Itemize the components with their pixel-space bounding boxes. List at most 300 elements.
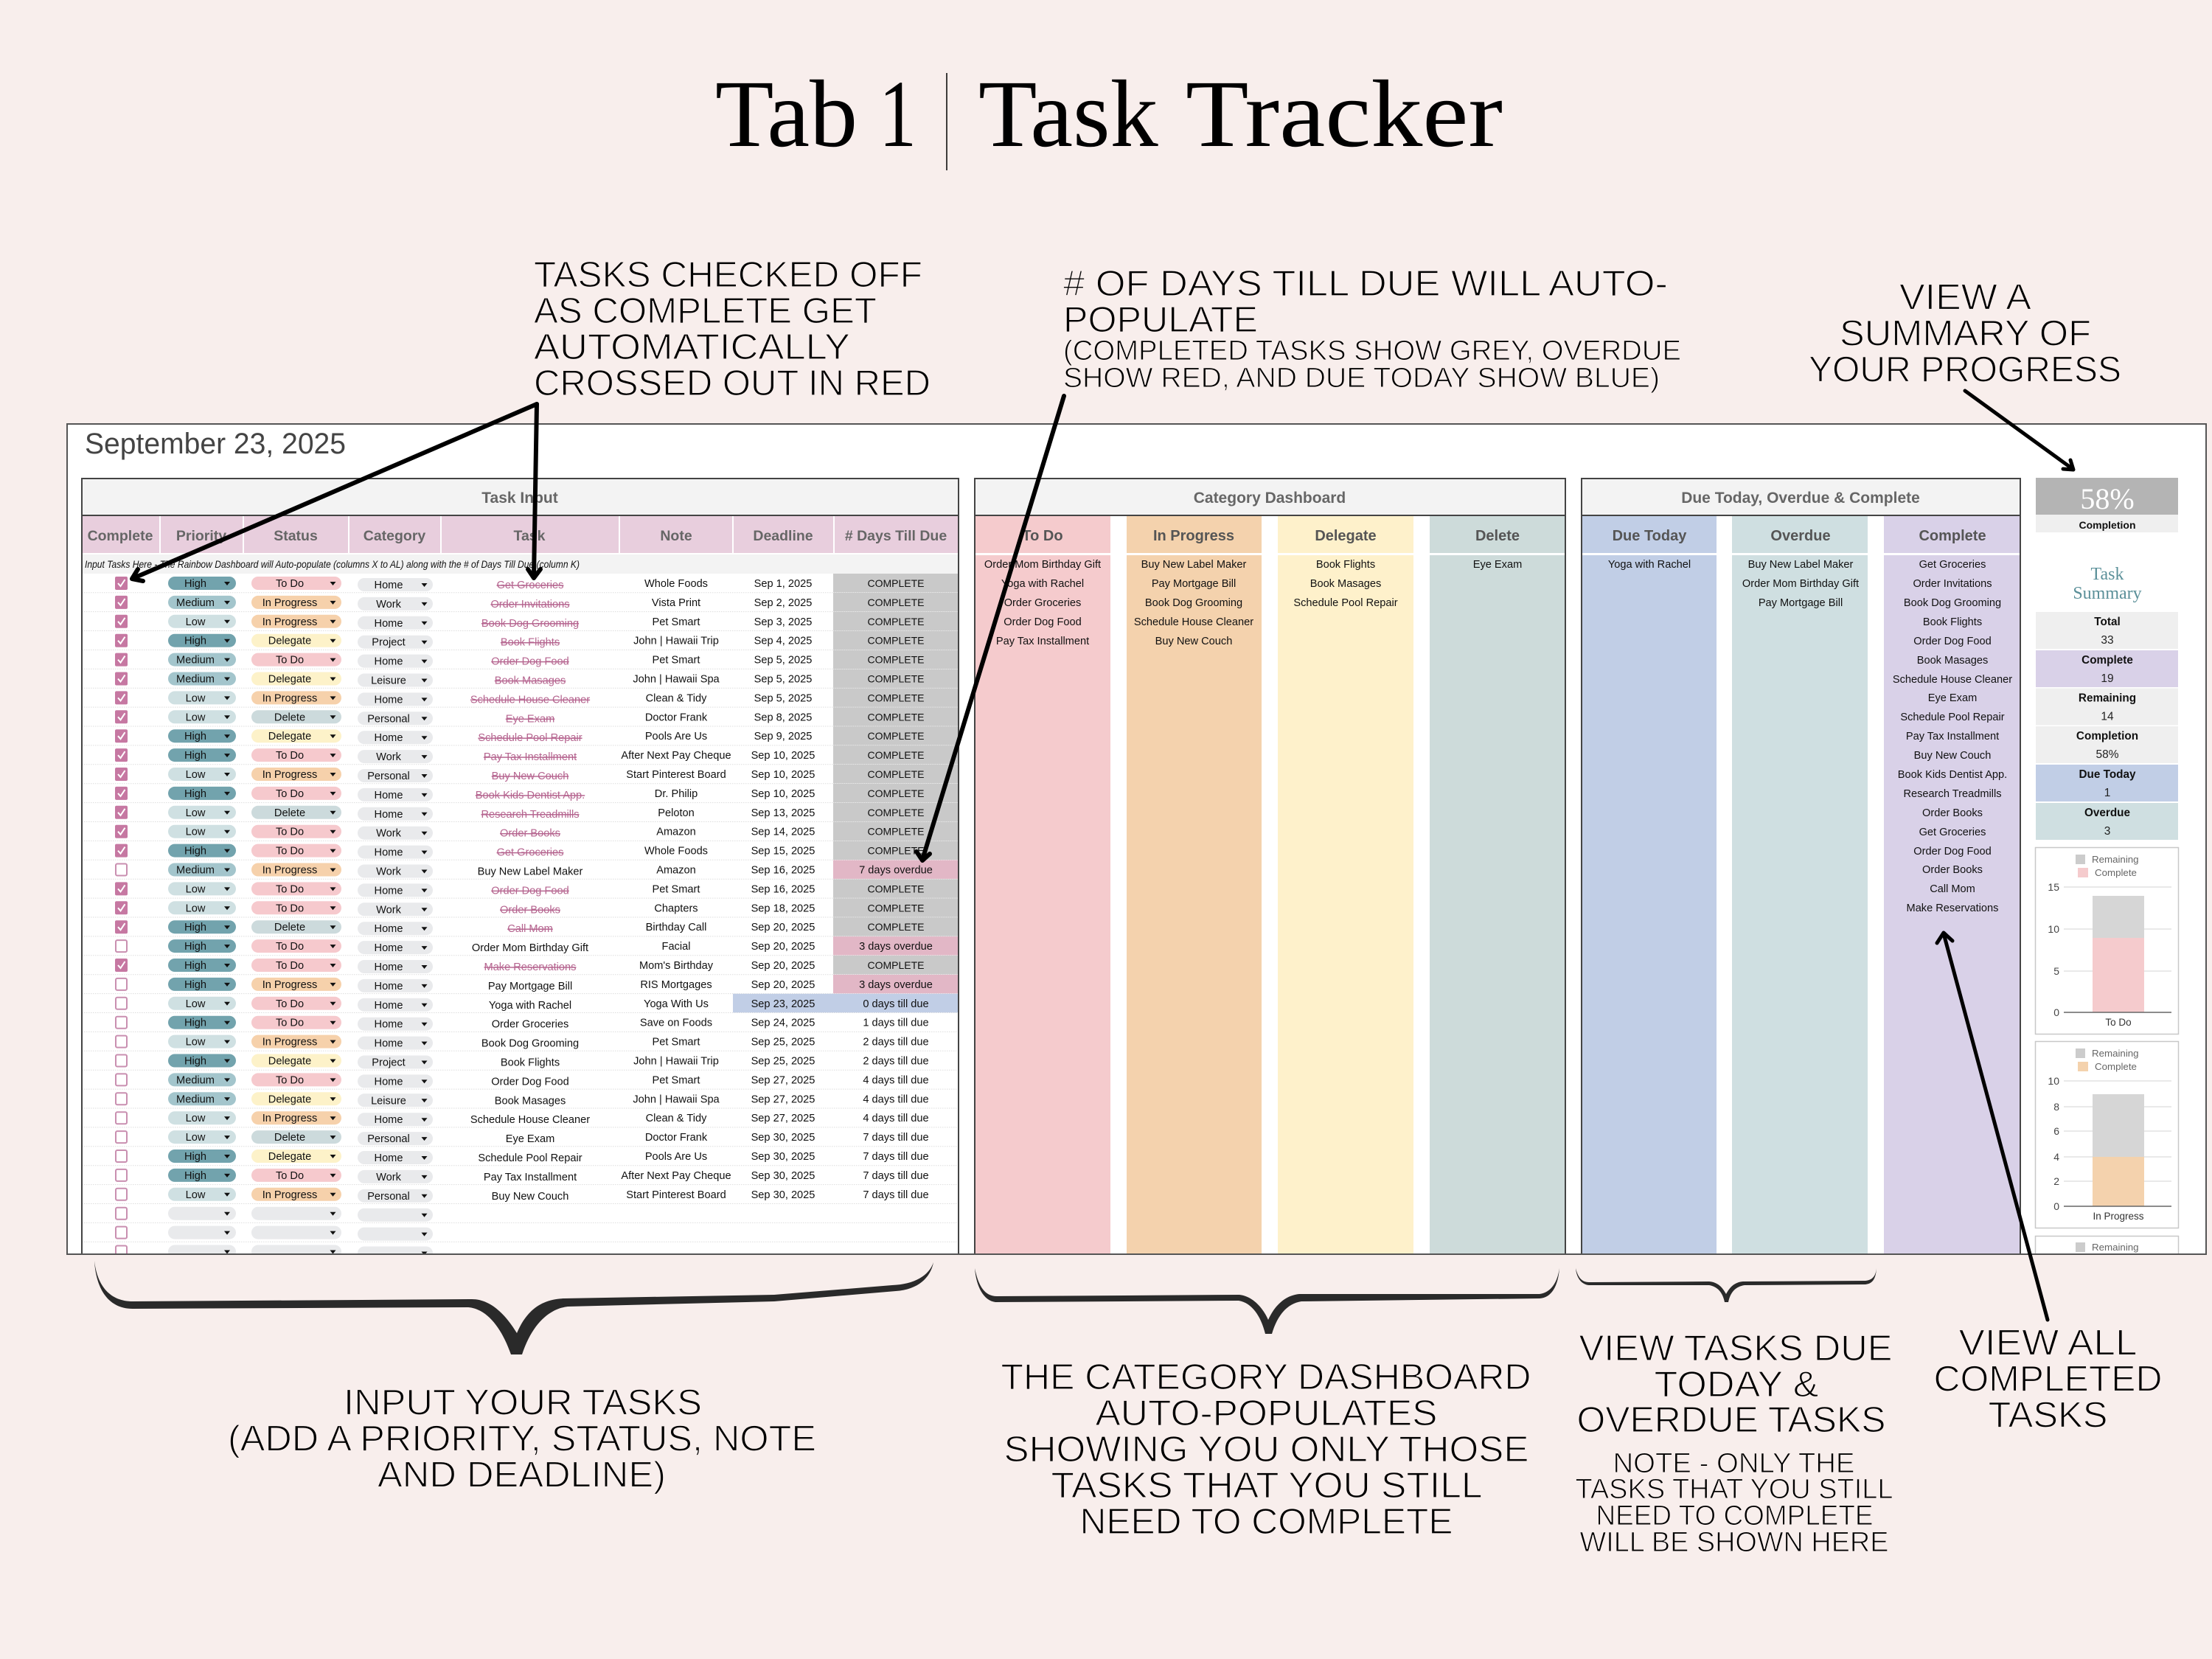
row 2: In Progress bbox=[262, 597, 317, 609]
row 13: Low bbox=[186, 807, 206, 819]
column: complete: Make Reservations bbox=[1907, 902, 1998, 914]
row 12: High bbox=[184, 788, 206, 800]
column: due today: Yoga with Rachel bbox=[1608, 559, 1691, 571]
arrow: to crossed-out task bbox=[528, 404, 540, 578]
column: to do: Pay Tax Installment bbox=[996, 636, 1089, 647]
row 7: In Progress bbox=[262, 692, 317, 704]
table frame lines bbox=[82, 479, 2020, 1254]
caption: category dashboard: AUTO-POPULATES bbox=[1096, 1394, 1438, 1433]
heading: due today: Due Today, Overdue & Complete bbox=[1681, 490, 1920, 507]
row 14: Low bbox=[186, 827, 206, 838]
panel: summary stats: Remaining bbox=[2079, 692, 2136, 705]
brace: category bbox=[975, 1268, 1559, 1334]
row 11: Buy New Couch bbox=[492, 771, 568, 782]
caption: view tasks due: NEED TO COMPLETE bbox=[1596, 1500, 1873, 1531]
column: complete: Order Books bbox=[1922, 864, 1983, 876]
column: to do: Order Dog Food bbox=[1004, 616, 1082, 628]
row 32: After Next Pay Cheque bbox=[621, 1170, 731, 1182]
column: complete: Pay Tax Installment bbox=[1906, 731, 1999, 742]
row 30: 7 days till due bbox=[863, 1132, 929, 1144]
panel: summary stats: Completion bbox=[2076, 730, 2138, 742]
row 7: Low bbox=[186, 692, 206, 704]
heading: category dashboard: Category Dashboard bbox=[1194, 490, 1346, 507]
row 6: Leisure bbox=[371, 675, 406, 687]
row 3: COMPLETE bbox=[867, 616, 925, 627]
row 23 bbox=[82, 994, 959, 1013]
row 27: Medium bbox=[176, 1074, 215, 1086]
row 2: Order Invitations bbox=[490, 599, 570, 611]
row 13: Research Treadmills bbox=[481, 809, 580, 821]
heading: task summary: Task bbox=[2091, 565, 2124, 584]
row 5: To Do bbox=[276, 655, 304, 667]
panel: summary stats bbox=[2036, 612, 2178, 840]
row 1: Sep 1, 2025 bbox=[754, 578, 812, 590]
column headers: Status bbox=[274, 528, 318, 544]
row 24: Home bbox=[375, 1019, 403, 1031]
row 19: Home bbox=[375, 923, 403, 935]
row 15: High bbox=[184, 846, 206, 858]
chart: to do bbox=[2035, 848, 2178, 1034]
panel: summary stats: 1 bbox=[2104, 787, 2110, 799]
row 33: Low bbox=[186, 1189, 206, 1201]
row 4: Book Flights bbox=[501, 637, 560, 649]
row 4: John | Hawaii Trip bbox=[633, 636, 719, 647]
row 25: Low bbox=[186, 1037, 206, 1048]
row 23: Sep 23, 2025 bbox=[751, 998, 815, 1010]
row 22: RIS Mortgages bbox=[640, 979, 712, 991]
row 13 bbox=[82, 803, 959, 821]
row 5: COMPLETE bbox=[867, 654, 925, 666]
column: delegate: Book Masages bbox=[1310, 578, 1381, 590]
row 18: Chapters bbox=[654, 902, 698, 914]
row 28: John | Hawaii Spa bbox=[633, 1093, 720, 1105]
row 24: Sep 24, 2025 bbox=[751, 1018, 815, 1029]
row 18: COMPLETE bbox=[867, 902, 925, 914]
panel: summary stats: Due Today bbox=[2079, 768, 2136, 781]
row 24 bbox=[82, 1016, 959, 1032]
row 13: Sep 13, 2025 bbox=[751, 807, 815, 819]
chart: in progress: 0 bbox=[2053, 1200, 2059, 1212]
row 9: Delegate bbox=[268, 731, 311, 742]
row 33: In Progress bbox=[262, 1189, 317, 1201]
sheet border bbox=[67, 424, 2206, 1254]
column: to do bbox=[984, 528, 1101, 647]
arrow: to completed tasks bbox=[1937, 933, 2048, 1320]
row 18: Work bbox=[376, 904, 402, 916]
row 19: Sep 20, 2025 bbox=[751, 922, 815, 933]
row 9: High bbox=[184, 731, 206, 742]
panel: completion bbox=[2036, 478, 2178, 532]
row 21: Sep 20, 2025 bbox=[751, 960, 815, 972]
column: complete: Complete bbox=[1919, 528, 1986, 544]
callout: days till due: POPULATE bbox=[1063, 300, 1258, 340]
panel: category dashboard bbox=[975, 479, 1565, 1254]
row 2: Work bbox=[376, 599, 402, 611]
column: in progress: Pay Mortgage Bill bbox=[1152, 578, 1236, 590]
row 4: COMPLETE bbox=[867, 635, 925, 647]
chart: to do: Remaining bbox=[2092, 854, 2139, 865]
row 2: Vista Print bbox=[652, 597, 700, 609]
row 6 bbox=[82, 669, 959, 688]
row 19 bbox=[82, 917, 959, 936]
row 29 bbox=[82, 1111, 959, 1127]
column: in progress: Buy New Couch bbox=[1155, 636, 1232, 647]
row 15 bbox=[82, 841, 959, 860]
row 22: Pay Mortgage Bill bbox=[488, 981, 572, 992]
panel: summary stats: 14 bbox=[2101, 711, 2114, 723]
row 19: COMPLETE bbox=[867, 921, 925, 933]
column: overdue: Overdue bbox=[1770, 528, 1831, 544]
row 25: In Progress bbox=[262, 1037, 317, 1048]
column: complete: Book Dog Grooming bbox=[1904, 597, 2001, 609]
column: complete: Get Groceries bbox=[1919, 559, 1986, 571]
row 27 bbox=[82, 1073, 959, 1089]
row 28: Delegate bbox=[268, 1093, 311, 1105]
column: to do: Order Mom Birthday Gift bbox=[984, 559, 1101, 571]
row 31: High bbox=[184, 1151, 206, 1163]
row 12: To Do bbox=[276, 788, 304, 800]
row 2 bbox=[82, 593, 959, 612]
row 30 bbox=[82, 1130, 959, 1147]
row 20: Order Mom Birthday Gift bbox=[472, 942, 588, 954]
row 8 bbox=[82, 707, 959, 726]
row 6: Medium bbox=[176, 674, 215, 686]
caption: input your tasks: AND DEADLINE) bbox=[378, 1455, 666, 1495]
row 12 bbox=[82, 784, 959, 803]
row 22: In Progress bbox=[262, 979, 317, 991]
column: complete: Schedule House Cleaner bbox=[1893, 674, 2012, 686]
caption: view tasks due: NOTE - ONLY THE bbox=[1613, 1448, 1855, 1479]
column: overdue bbox=[1742, 528, 1859, 609]
row 25: Sep 25, 2025 bbox=[751, 1037, 815, 1048]
row 20 bbox=[82, 936, 959, 956]
row 1: To Do bbox=[276, 578, 304, 590]
row 30: Low bbox=[186, 1132, 206, 1144]
row 14: Amazon bbox=[656, 827, 696, 838]
row 11: Sep 10, 2025 bbox=[751, 769, 815, 781]
chart: delegate, clipped bbox=[2035, 1236, 2178, 1280]
row 9: Home bbox=[375, 732, 403, 744]
row 20: Home bbox=[375, 942, 403, 954]
row 11: Start Pinterest Board bbox=[626, 769, 726, 781]
row 29: Home bbox=[375, 1114, 403, 1126]
row 16 bbox=[82, 860, 959, 879]
row 21: Mom's Birthday bbox=[639, 960, 714, 972]
row 24: Order Groceries bbox=[492, 1019, 568, 1031]
row 24: Save on Foods bbox=[640, 1018, 712, 1029]
row 30: Eye Exam bbox=[506, 1133, 554, 1145]
caption: category dashboard: THE CATEGORY DASHBOARD bbox=[1001, 1357, 1531, 1397]
column headers: Category bbox=[364, 528, 425, 544]
row 6: Delegate bbox=[268, 674, 311, 686]
row 21: To Do bbox=[276, 960, 304, 972]
row 25: 2 days till due bbox=[863, 1037, 929, 1048]
row 7: Clean & Tidy bbox=[646, 692, 707, 704]
caption: view all completed: VIEW ALL bbox=[1958, 1323, 2137, 1363]
row 2: COMPLETE bbox=[867, 597, 925, 608]
panel: summary stats: 33 bbox=[2101, 634, 2114, 647]
caption: view all completed bbox=[1933, 1323, 2162, 1435]
panel: completion: 58% bbox=[2080, 482, 2135, 515]
row 21: COMPLETE bbox=[867, 959, 925, 971]
row 9: Sep 9, 2025 bbox=[754, 731, 812, 742]
column headers: Complete bbox=[88, 528, 153, 544]
row 22: High bbox=[184, 979, 206, 991]
row 27: 4 days till due bbox=[863, 1074, 929, 1086]
column: overdue: Order Mom Birthday Gift bbox=[1742, 578, 1859, 590]
row 26: High bbox=[184, 1056, 206, 1068]
panel: due today, overdue and complete bbox=[1582, 479, 2020, 1254]
row 14 bbox=[82, 822, 959, 841]
row 24: 1 days till due bbox=[863, 1018, 929, 1029]
row 16: Medium bbox=[176, 864, 215, 876]
column: delete: Delete bbox=[1475, 528, 1520, 544]
row 13: COMPLETE bbox=[867, 807, 925, 818]
row 13: Delete bbox=[274, 807, 305, 819]
column headers: Task bbox=[513, 528, 546, 544]
row 4 bbox=[82, 631, 959, 650]
caption: view tasks due: TASKS THAT YOU STILL bbox=[1575, 1474, 1893, 1505]
row 10: Pay Tax Installment bbox=[484, 751, 577, 763]
row 3 bbox=[82, 612, 959, 631]
caption: view all completed: TASKS bbox=[1988, 1395, 2107, 1435]
row 26: John | Hawaii Trip bbox=[633, 1056, 719, 1068]
brace: due today bbox=[1576, 1268, 1877, 1302]
row 7: Sep 5, 2025 bbox=[754, 692, 812, 704]
caption: view tasks due: TODAY & bbox=[1655, 1365, 1818, 1405]
row 20: Sep 20, 2025 bbox=[751, 941, 815, 953]
row 14: COMPLETE bbox=[867, 826, 925, 838]
column: delegate: Schedule Pool Repair bbox=[1293, 597, 1398, 609]
panel: completion: Completion bbox=[2079, 519, 2135, 531]
row 17: Sep 16, 2025 bbox=[751, 883, 815, 895]
panel: summary stats: 3 bbox=[2104, 825, 2110, 838]
row 10: Sep 10, 2025 bbox=[751, 750, 815, 762]
row 15: Sep 15, 2025 bbox=[751, 846, 815, 858]
instruction note: Input Tasks Here - The Rainbow Dashboard will Auto-populate (columns X to AL) along with the # of Days Till Due (column K) bbox=[85, 558, 580, 570]
column: delete bbox=[1473, 528, 1522, 571]
row 22 bbox=[82, 975, 959, 994]
row 15: To Do bbox=[276, 846, 304, 858]
column: complete: Call Mom bbox=[1930, 883, 1975, 895]
row 30: Delete bbox=[274, 1132, 305, 1144]
row 7 bbox=[82, 688, 959, 707]
row 4: Sep 4, 2025 bbox=[754, 636, 812, 647]
row 29: Clean & Tidy bbox=[646, 1113, 707, 1124]
row 16: Work bbox=[376, 866, 402, 877]
column: to do: Order Groceries bbox=[1004, 597, 1081, 609]
row 12: Dr. Philip bbox=[655, 788, 698, 800]
row 6: Sep 5, 2025 bbox=[754, 674, 812, 686]
row 33: 7 days till due bbox=[863, 1189, 929, 1201]
row 29: Schedule House Cleaner bbox=[470, 1114, 590, 1126]
row 27: Pet Smart bbox=[653, 1074, 700, 1086]
row 18: Order Books bbox=[500, 904, 560, 916]
title bbox=[715, 61, 1503, 170]
row 34 empty bbox=[82, 1207, 959, 1222]
callout: days till due bbox=[1063, 264, 1681, 394]
row 10: After Next Pay Cheque bbox=[621, 750, 731, 762]
heading: task input: Task Input bbox=[481, 490, 558, 507]
row 15: Home bbox=[375, 847, 403, 859]
panel: summary stats: 58% bbox=[2096, 748, 2119, 761]
title: Tab bbox=[715, 61, 858, 167]
row 2: Medium bbox=[176, 597, 215, 609]
row 33: Start Pinterest Board bbox=[626, 1189, 726, 1201]
caption: category dashboard: SHOWING YOU ONLY THOSE bbox=[1004, 1430, 1529, 1470]
caption: category dashboard bbox=[1001, 1357, 1531, 1542]
callout: days till due: SHOW RED, AND DUE TODAY SHOW BLUE) bbox=[1063, 363, 1660, 394]
row 14: Work bbox=[376, 828, 402, 840]
chart: in progress: Complete bbox=[2095, 1061, 2137, 1072]
row 13: Home bbox=[375, 809, 403, 821]
chart: in progress: 6 bbox=[2053, 1125, 2059, 1137]
column: complete: Order Dog Food bbox=[1913, 846, 1992, 858]
row 21 bbox=[82, 956, 959, 975]
row 8: Personal bbox=[367, 713, 410, 725]
callout: view a summary: YOUR PROGRESS bbox=[1809, 349, 2121, 389]
row 17: Order Dog Food bbox=[491, 885, 569, 897]
row 1: Whole Foods bbox=[644, 578, 708, 590]
row 8: Low bbox=[186, 712, 206, 723]
row 28 bbox=[82, 1092, 959, 1108]
row 32: Work bbox=[376, 1172, 402, 1183]
column: delete: Eye Exam bbox=[1473, 559, 1522, 571]
row 28: Leisure bbox=[371, 1095, 406, 1107]
row 25 bbox=[82, 1035, 959, 1051]
caption: view tasks due: VIEW TASKS DUE bbox=[1579, 1329, 1892, 1368]
brace: input bbox=[94, 1261, 933, 1354]
row 25: Pet Smart bbox=[653, 1037, 700, 1048]
chart: in progress: 8 bbox=[2053, 1101, 2059, 1113]
callout: tasks checked off: AS COMPLETE GET bbox=[534, 291, 877, 331]
spreadsheet panel bbox=[67, 424, 2206, 1280]
date heading: September 23, 2025 bbox=[85, 428, 346, 460]
column headers: Deadline bbox=[753, 528, 813, 544]
row 31: Home bbox=[375, 1152, 403, 1164]
chart: in progress: 10 bbox=[2048, 1075, 2059, 1087]
chart: delegate, clipped: Remaining bbox=[2092, 1242, 2139, 1253]
row 13: Peloton bbox=[658, 807, 695, 819]
column: in progress: In Progress bbox=[1153, 528, 1234, 544]
row 20: Facial bbox=[662, 941, 690, 953]
row 3: Book Dog Grooming bbox=[481, 618, 579, 630]
row 19: Call Mom bbox=[507, 923, 553, 935]
row 31: Delegate bbox=[268, 1151, 311, 1163]
row 18: Low bbox=[186, 902, 206, 914]
callout: view a summary bbox=[1809, 277, 2121, 389]
heading: task summary bbox=[2073, 565, 2142, 603]
row 33: Buy New Couch bbox=[492, 1191, 568, 1203]
row 29: Low bbox=[186, 1113, 206, 1124]
row 1: COMPLETE bbox=[867, 577, 925, 589]
row 17: Home bbox=[375, 885, 403, 897]
row 29: 4 days till due bbox=[863, 1113, 929, 1124]
row 7: Home bbox=[375, 694, 403, 706]
row 26: Delegate bbox=[268, 1056, 311, 1068]
row 3: Sep 3, 2025 bbox=[754, 616, 812, 628]
column: complete: Book Masages bbox=[1917, 655, 1988, 667]
caption: input your tasks: (ADD A PRIORITY, STATUS, NOTE bbox=[228, 1419, 816, 1458]
row 23: Home bbox=[375, 1000, 403, 1012]
row 6: John | Hawaii Spa bbox=[633, 674, 720, 686]
row 9: Schedule Pool Repair bbox=[478, 732, 582, 744]
column: complete: Order Invitations bbox=[1913, 578, 1992, 590]
row 4: High bbox=[184, 636, 206, 647]
row 11: Personal bbox=[367, 771, 410, 782]
row 20: To Do bbox=[276, 941, 304, 953]
callout: view a summary: VIEW A bbox=[1899, 277, 2031, 317]
chart: to do: To Do bbox=[2105, 1017, 2132, 1028]
row 18: Sep 18, 2025 bbox=[751, 902, 815, 914]
row 11: COMPLETE bbox=[867, 768, 925, 780]
row 31: Sep 30, 2025 bbox=[751, 1151, 815, 1163]
row 11 bbox=[82, 765, 959, 784]
callout: tasks checked off: TASKS CHECKED OFF bbox=[534, 255, 922, 295]
chart: in progress bbox=[2035, 1041, 2178, 1228]
heading: task summary: Summary bbox=[2073, 584, 2142, 603]
row 26: 2 days till due bbox=[863, 1056, 929, 1068]
row 33 bbox=[82, 1188, 959, 1203]
row 14: To Do bbox=[276, 827, 304, 838]
column: due today: Due Today bbox=[1613, 528, 1687, 544]
row 23: Yoga with Rachel bbox=[489, 1000, 571, 1012]
row 1: High bbox=[184, 578, 206, 590]
title: Tracker bbox=[1186, 61, 1503, 167]
row 32: 7 days till due bbox=[863, 1170, 929, 1182]
row 9 bbox=[82, 726, 959, 745]
row 3: Pet Smart bbox=[653, 616, 700, 628]
column: overdue: Pay Mortgage Bill bbox=[1759, 597, 1843, 609]
row 14: Sep 14, 2025 bbox=[751, 827, 815, 838]
row 23: Low bbox=[186, 998, 206, 1010]
row 8: Eye Exam bbox=[506, 713, 554, 725]
row 32: High bbox=[184, 1170, 206, 1182]
chart: to do: 10 bbox=[2048, 923, 2059, 935]
row 9: Pools Are Us bbox=[645, 731, 707, 742]
callout: days till due: (COMPLETED TASKS SHOW GREY, OVERDUE bbox=[1063, 335, 1681, 366]
callout: view a summary: SUMMARY OF bbox=[1840, 314, 2091, 354]
panel: task input bbox=[82, 479, 959, 1261]
column: overdue: Buy New Label Maker bbox=[1748, 559, 1854, 571]
row 30: Doctor Frank bbox=[645, 1132, 708, 1144]
row 24: High bbox=[184, 1018, 206, 1029]
row 33: Sep 30, 2025 bbox=[751, 1189, 815, 1201]
row 28: Sep 27, 2025 bbox=[751, 1093, 815, 1105]
column: complete: Order Books bbox=[1922, 807, 1983, 819]
row 12: COMPLETE bbox=[867, 787, 925, 799]
row 25: Book Dog Grooming bbox=[481, 1038, 579, 1050]
row 22: Sep 20, 2025 bbox=[751, 979, 815, 991]
row 32: Pay Tax Installment bbox=[484, 1172, 577, 1183]
row 4: Delegate bbox=[268, 636, 311, 647]
row 8: COMPLETE bbox=[867, 711, 925, 723]
chart: to do: 5 bbox=[2053, 965, 2059, 977]
row 4: Project bbox=[372, 637, 406, 649]
row 29: In Progress bbox=[262, 1113, 317, 1124]
caption: view tasks due: OVERDUE TASKS bbox=[1576, 1400, 1886, 1440]
callout: tasks checked off bbox=[534, 255, 931, 403]
row 17: To Do bbox=[276, 883, 304, 895]
row 32: Sep 30, 2025 bbox=[751, 1170, 815, 1182]
row 26: Project bbox=[372, 1057, 406, 1069]
row 2: Sep 2, 2025 bbox=[754, 597, 812, 609]
chart: to do: Complete bbox=[2095, 867, 2137, 878]
row 21: High bbox=[184, 960, 206, 972]
panel: summary stats: 19 bbox=[2101, 672, 2114, 685]
column: in progress: Schedule House Cleaner bbox=[1134, 616, 1253, 628]
caption: view tasks due: WILL BE SHOWN HERE bbox=[1579, 1527, 1889, 1558]
